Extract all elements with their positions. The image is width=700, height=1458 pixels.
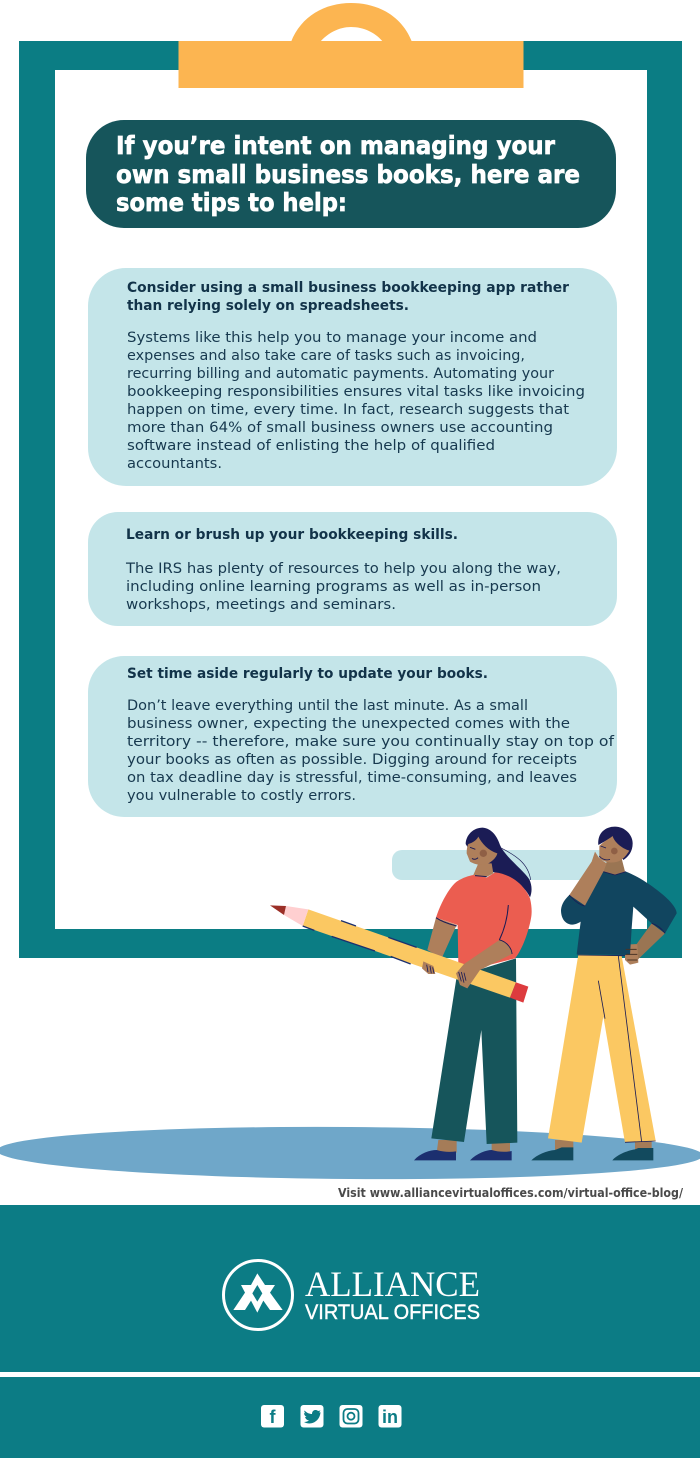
illustration: two people with pencil <box>270 827 677 1160</box>
panel: bookkeeping app tip: more than 64% of small business owners use accounting <box>127 419 553 436</box>
small empty note bar <box>392 850 608 880</box>
icon: twitter <box>300 1405 324 1428</box>
woman features <box>436 847 508 940</box>
icon: facebook <box>261 1405 284 1428</box>
panel: bookkeeping skills tip: The IRS has plenty of resources to help you along the way, <box>125 560 561 577</box>
title banner <box>86 120 616 228</box>
woman strand <box>502 848 531 880</box>
panel: update books tip: territory -- therefore, make sure you continually stay on top of <box>127 733 615 750</box>
panel: update books tip <box>88 656 617 817</box>
panel: update books tip: you vulnerable to costly errors. <box>127 787 356 804</box>
panel: bookkeeping app tip: software instead of enlisting the help of qualified <box>127 437 495 454</box>
man neck <box>603 858 625 875</box>
logo wordmark top: ALLIANCE <box>305 1264 480 1304</box>
panel: bookkeeping skills tip <box>88 512 617 626</box>
title banner: own small business books, here are <box>116 160 580 189</box>
pencil tip <box>270 905 286 915</box>
pencil <box>270 905 528 1003</box>
panel: bookkeeping app tip: happen on time, every time. In fact, research suggests that <box>127 401 569 418</box>
woman forearm and hand <box>422 940 512 988</box>
panel: update books tip: on tax deadline day is stressful, time-consuming, and leaves <box>127 769 577 786</box>
panel: bookkeeping app tip <box>88 268 617 486</box>
pencil eraser <box>510 982 528 1003</box>
pencil wood <box>284 906 308 926</box>
woman face <box>467 837 497 865</box>
woman <box>414 828 532 1160</box>
woman left arm <box>427 918 457 958</box>
panel: bookkeeping app tip: accountants. <box>127 455 222 472</box>
woman neck <box>473 863 493 878</box>
woman ankles <box>437 1140 510 1153</box>
pencil body <box>303 909 516 998</box>
footer: social band <box>0 1377 700 1458</box>
woman shoes <box>414 1150 512 1160</box>
ground ellipse <box>0 1125 700 1181</box>
man shirt <box>561 872 677 955</box>
woman hands <box>422 940 512 988</box>
man shoes <box>531 1147 653 1160</box>
panel: bookkeeping app tip: expenses and also take care of tasks such as invoicing, <box>127 347 525 364</box>
panel: bookkeeping skills tip: Learn or brush up your bookkeeping skills. <box>126 526 458 543</box>
woman hair <box>466 828 532 897</box>
panel: bookkeeping app tip: bookkeeping responsibilities ensures vital tasks like invoicing <box>127 383 585 400</box>
woman elbow line <box>499 940 512 954</box>
panel: update books tip: Set time aside regularly to update your books. <box>127 665 488 682</box>
pencil marks <box>303 921 417 964</box>
man hair <box>598 827 633 860</box>
panel: bookkeeping app tip: Systems like this help you to manage your income and <box>127 329 537 346</box>
logo ring <box>224 1260 292 1330</box>
woman fingers <box>427 965 466 983</box>
logo mark <box>233 1273 283 1313</box>
panel: update books tip: your books as often as possible. Digging around for receipts <box>127 751 577 768</box>
clipboard <box>19 3 682 958</box>
panel: bookkeeping app tip: Consider using a small business bookkeeping app rather <box>127 279 570 296</box>
man arm raised <box>569 852 607 906</box>
clipboard frame <box>19 41 682 958</box>
clip ring <box>291 3 412 42</box>
social icons <box>261 1405 402 1428</box>
icon: linkedin <box>378 1405 402 1428</box>
man features <box>569 846 665 933</box>
man fingers <box>626 949 637 960</box>
man trouser lines <box>578 955 656 1142</box>
logo wordmark bottom: VIRTUAL OFFICES <box>305 1301 480 1324</box>
man right forearm <box>625 923 665 960</box>
man <box>531 827 677 1160</box>
footer: logo band <box>0 1205 700 1372</box>
panel: update books tip: business owner, expecting the unexpected comes with the <box>127 715 570 732</box>
man ankles <box>555 1140 652 1150</box>
icon: linkedin: in <box>382 1407 398 1427</box>
title banner: some tips to help: <box>116 188 347 217</box>
panel: bookkeeping app tip: recurring billing and automatic payments. Automating your <box>127 365 554 382</box>
icon: instagram <box>340 1405 362 1428</box>
woman shirt <box>436 872 532 966</box>
title banner: If you’re intent on managing your <box>116 131 556 160</box>
panel: bookkeeping skills tip: workshops, meetings and seminars. <box>126 596 396 613</box>
logo <box>224 1260 480 1330</box>
man trousers <box>548 955 656 1143</box>
woman trousers <box>431 958 517 1144</box>
icon: facebook: f <box>270 1407 276 1427</box>
clip base <box>178 41 524 88</box>
panel: bookkeeping skills tip: including online learning programs as well as in-person <box>126 578 541 595</box>
panel: update books tip: Don’t leave everything until the last minute. As a small <box>127 697 528 714</box>
man hand on hip <box>625 944 638 965</box>
man cheek <box>611 848 618 854</box>
man face <box>599 836 629 863</box>
woman cheek <box>480 850 487 857</box>
panel: bookkeeping app tip: than relying solely on spreadsheets. <box>127 297 409 314</box>
